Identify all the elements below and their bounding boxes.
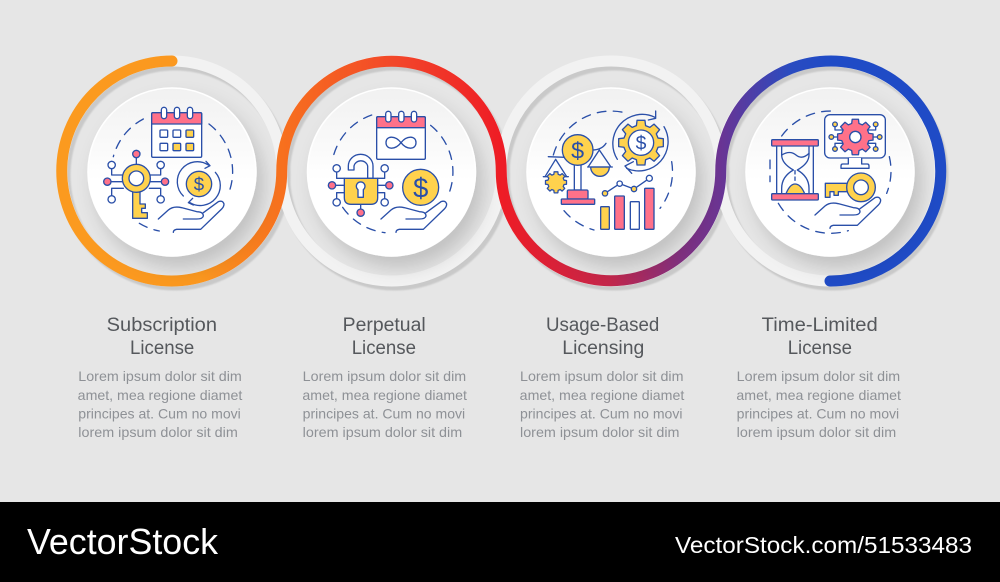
- text block: usage-based licensing: Licensing: [562, 338, 644, 359]
- text block: perpetual license: amet, mea regione diamet: [302, 387, 467, 403]
- icon: usage-based licensing: [543, 111, 673, 230]
- text block: usage-based licensing: principes at. Cum no movi: [520, 406, 682, 422]
- text block: time-limited license: principes at. Cum no movi: [737, 406, 899, 422]
- text block: usage-based licensing: Lorem ipsum dolor sit dim: [520, 368, 684, 384]
- text block: perpetual license: Lorem ipsum dolor sit dim: [303, 368, 466, 384]
- footer brand: VectorStock: [27, 521, 219, 562]
- icon: usage-based licensing: $: [636, 134, 647, 155]
- light rings: [62, 61, 940, 281]
- text block: subscription license: lorem ipsum dolor sit dim: [78, 424, 238, 440]
- icon: usage-based licensing: $: [571, 138, 584, 164]
- icon: perpetual license: [328, 111, 453, 233]
- text block: time-limited license: License: [788, 338, 852, 359]
- icon: subscription license: $: [194, 174, 205, 195]
- text block: subscription license: [78, 315, 242, 440]
- gradient timeline path: [62, 61, 941, 281]
- text block: usage-based licensing: amet, mea regione diamet: [520, 387, 684, 403]
- text block: subscription license: amet, mea regione diamet: [78, 387, 242, 403]
- icon: subscription license: [104, 107, 233, 232]
- icon: perpetual license: $: [413, 172, 428, 203]
- text block: time-limited license: lorem ipsum dolor sit dim: [737, 424, 896, 440]
- text block: subscription license: License: [130, 338, 194, 359]
- text block: time-limited license: amet, mea regione diamet: [736, 387, 901, 403]
- text block: time-limited license: Time-Limited: [762, 315, 878, 336]
- text block: usage-based licensing: Usage-Based: [546, 315, 659, 336]
- text block: subscription license: principes at. Cum no movi: [78, 406, 241, 422]
- footer bar: [0, 502, 1000, 582]
- text block: time-limited license: [736, 315, 901, 440]
- text block: subscription license: Subscription: [107, 315, 217, 336]
- ring shadows: [65, 65, 943, 285]
- white disks: [88, 88, 914, 256]
- icon: time-limited license: [770, 111, 891, 233]
- text block: perpetual license: lorem ipsum dolor sit dim: [303, 424, 462, 440]
- text block: usage-based licensing: lorem ipsum dolor sit dim: [520, 424, 680, 440]
- text block: perpetual license: principes at. Cum no movi: [303, 406, 465, 422]
- text block: time-limited license: Lorem ipsum dolor sit dim: [737, 368, 900, 384]
- text block: perpetual license: License: [352, 338, 416, 359]
- text block: perpetual license: [302, 315, 467, 440]
- text block: subscription license: Lorem ipsum dolor sit dim: [78, 368, 242, 384]
- footer image id: VectorStock.com/51533483: [675, 532, 972, 558]
- text block: perpetual license: Perpetual: [343, 315, 426, 336]
- text block: usage-based licensing: [520, 315, 684, 440]
